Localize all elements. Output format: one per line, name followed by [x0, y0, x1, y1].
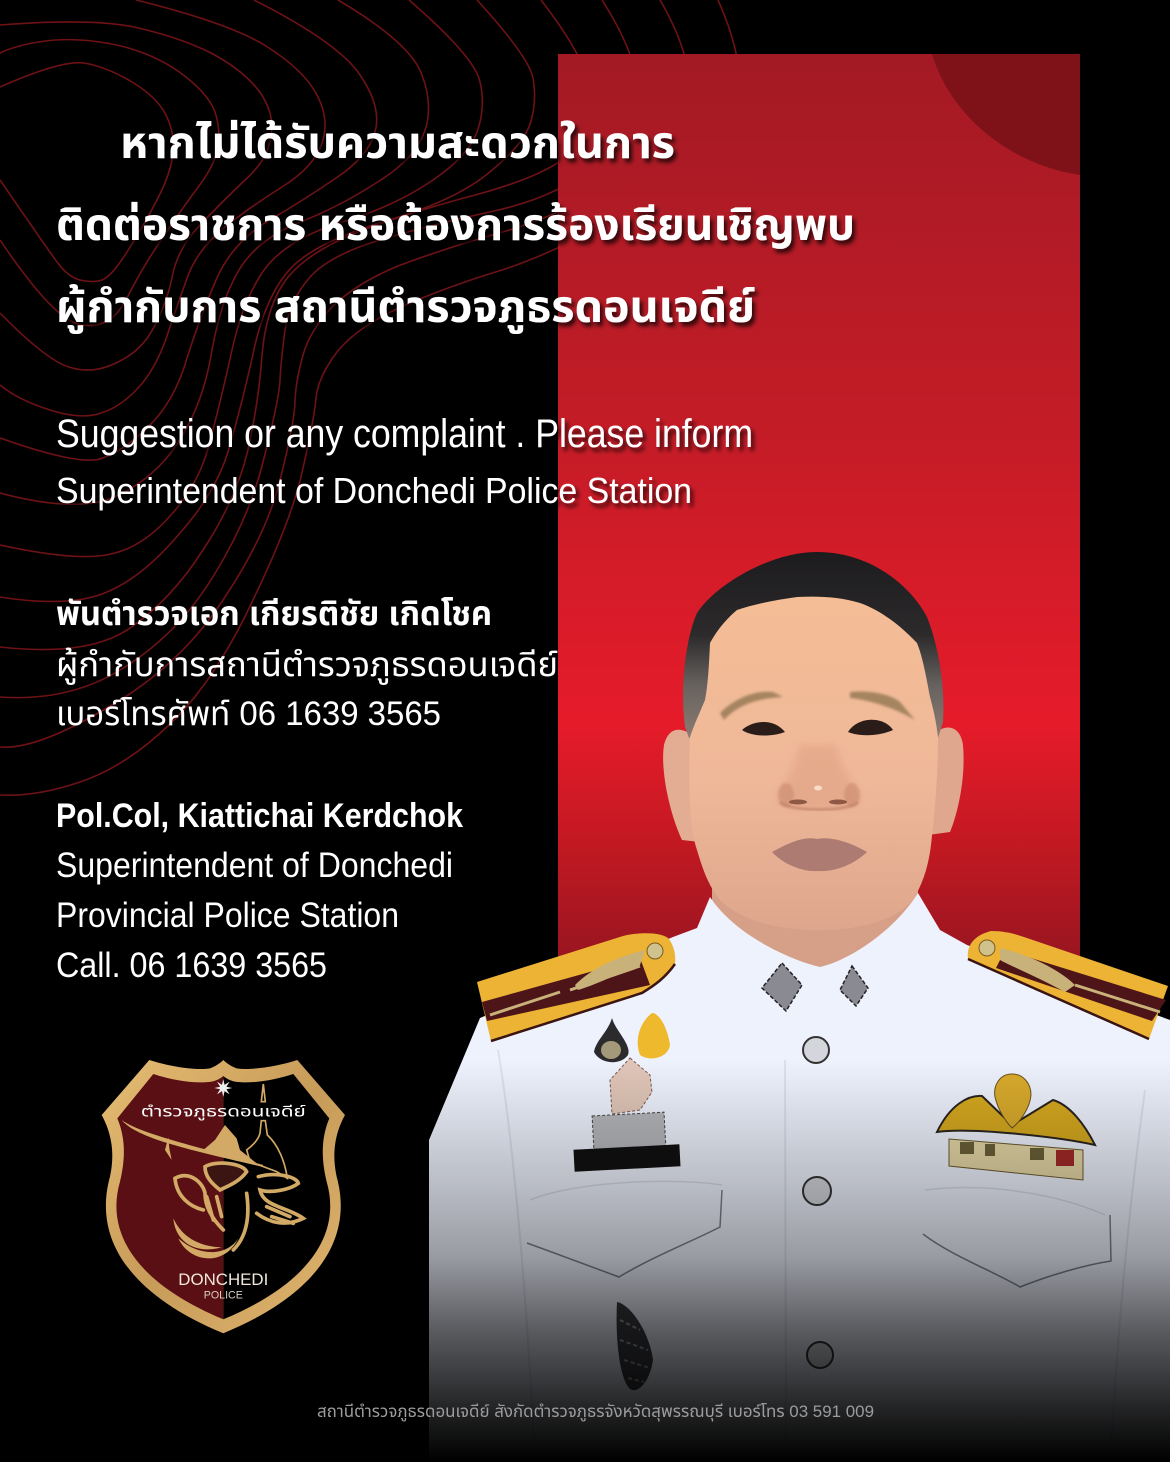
star: ✷	[214, 1076, 233, 1102]
Thai contact details: พันตำรวจเอก เกียรติชัย เกิดโชค	[56, 595, 492, 633]
logo thai name: ตำรวจภูธรดอนเจดีย์	[141, 1104, 306, 1121]
Thai heading: ผู้กำกับการ สถานีตำรวจภูธรดอนเจดีย์	[56, 283, 755, 334]
pocket grenade emblem	[617, 1302, 653, 1390]
elephant tusks	[173, 1218, 238, 1258]
English contact details: Provincial Police Station	[56, 896, 399, 935]
eyes	[742, 722, 785, 736]
Thai contact details: เบอร์โทรศัพท์ 06 1639 3565	[56, 695, 441, 733]
red background panel	[558, 54, 1080, 964]
English contact details: Superintendent of Donchedi	[56, 846, 453, 885]
left ear	[663, 730, 700, 842]
right chest parachute wings and ribbons	[937, 1074, 1095, 1180]
spire and chedi	[247, 1084, 287, 1178]
pockets	[527, 1181, 1111, 1287]
left shoulder board	[477, 933, 675, 1041]
footer address: สถานีตำรวจภูธรดอนเจดีย์ สังกัดตำรวจภูธรจังหวัดสุพรรณบุรี เบอร์โทร 03 591 009	[317, 1402, 874, 1423]
Thai contact details: ผู้กำกับการสถานีตำรวจภูธรดอนเจดีย์	[56, 646, 558, 685]
collar pins	[762, 963, 868, 1011]
shield right black half	[223, 1074, 330, 1319]
right ear	[928, 728, 964, 835]
English subheading: Superintendent of Donchedi Police Station	[56, 470, 692, 511]
DONCHEDI: DONCHEDI	[178, 1270, 268, 1289]
background contour lines	[0, 0, 741, 795]
nose	[778, 745, 860, 810]
eyebrows	[720, 692, 783, 720]
Thai heading: ติดต่อราชการ หรือต้องการร้องเรียนเชิญพบ	[56, 201, 855, 250]
Thai heading: หากไม่ได้รับความสะดวกในการ	[120, 119, 675, 168]
hair cap	[683, 552, 943, 738]
face	[689, 597, 938, 930]
shield left maroon half	[116, 1074, 223, 1319]
neck	[712, 850, 918, 975]
Thai heading	[56, 119, 855, 334]
elephant head	[175, 1163, 303, 1250]
right shoulder board	[968, 931, 1168, 1039]
shield outer gold	[102, 1060, 345, 1333]
English contact details: Call. 06 1639 3565	[56, 946, 327, 985]
corner circle on panel	[932, 54, 1080, 175]
English subheading: Suggestion or any complaint . Please inform	[56, 412, 753, 456]
bottom fade to black	[429, 1060, 1170, 1462]
uniform shading seams	[498, 1050, 1145, 1462]
spear and rider	[122, 1120, 263, 1167]
left chest badges	[573, 1013, 681, 1172]
English contact details: Pol.Col, Kiattichai Kerdchok	[56, 797, 463, 835]
portrait illustration of the officer	[429, 552, 1170, 1462]
POLICE: POLICE	[204, 1289, 243, 1301]
Thai contact details	[56, 595, 558, 733]
buttons	[803, 1037, 833, 1368]
uniform body	[429, 893, 1170, 1462]
English contact details	[56, 797, 463, 985]
police shield logo	[102, 1060, 345, 1333]
English subheading	[56, 412, 753, 511]
mouth	[772, 838, 867, 871]
